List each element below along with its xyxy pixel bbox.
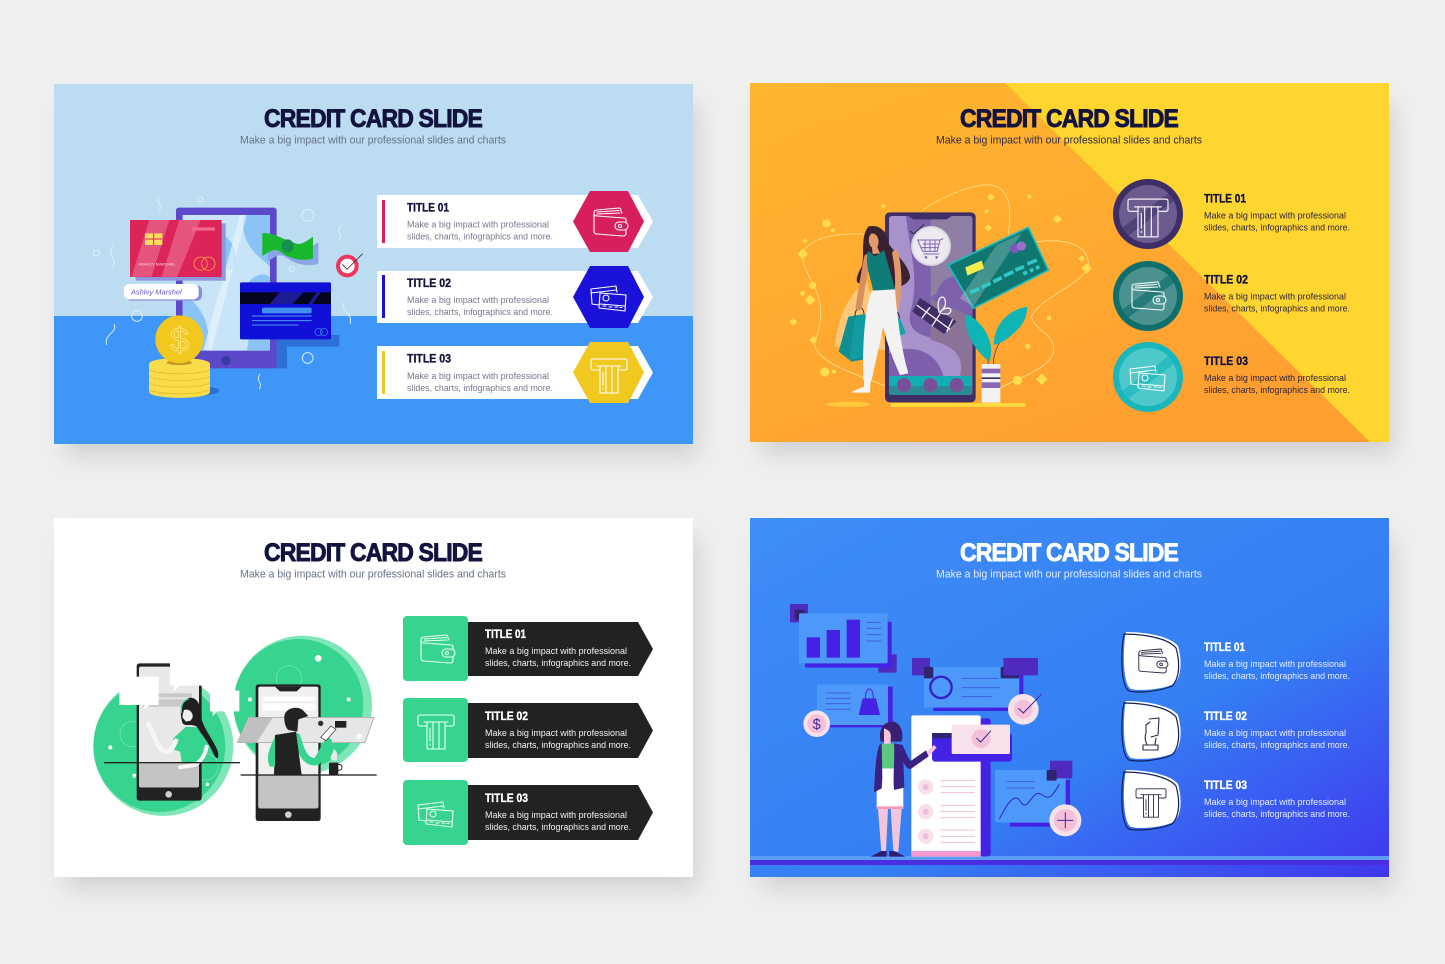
coin stack	[149, 315, 219, 398]
shopping bag card: $	[813, 717, 821, 733]
shopping bag card	[803, 684, 893, 737]
line chart card	[995, 761, 1081, 836]
text: title 02: slides, charts, infographics and more.	[1204, 304, 1350, 314]
red credit card: ASHLEY MARSHEL	[138, 262, 176, 266]
name label: Ashley Marshel	[130, 289, 182, 296]
row 1: TITLE 01	[407, 200, 449, 214]
row 1: slides, charts, infographics and more.	[485, 658, 631, 668]
text: title 03: Make a big impact with professional	[1204, 797, 1346, 807]
dashboard document	[911, 715, 1012, 857]
name label	[124, 284, 202, 301]
text: title 03: slides, charts, infographics and more.	[1204, 385, 1350, 395]
panel: light blue slide	[54, 84, 693, 444]
teal credit card	[948, 227, 1048, 308]
text: title 02	[1204, 272, 1350, 314]
right phone	[256, 684, 321, 821]
row 2	[377, 266, 653, 328]
speech bubbles	[119, 657, 239, 716]
row 2	[403, 698, 653, 762]
row 3: Make a big impact with professional	[407, 371, 549, 381]
text: title 03: TITLE 03	[1204, 354, 1248, 368]
row 3: slides, charts, infographics and more.	[407, 383, 553, 393]
row 1	[377, 191, 653, 252]
row 1: TITLE 01	[485, 627, 526, 641]
subtitle: Make a big impact with our professional slides and charts	[240, 134, 506, 146]
text: title 03: Make a big impact with professional	[1204, 373, 1346, 383]
illustration: woman shopping on phone	[789, 185, 1092, 407]
text: title 01: TITLE 01	[1204, 640, 1245, 654]
banknote	[262, 233, 318, 265]
row 2: Make a big impact with professional	[485, 728, 627, 738]
heading: CREDIT CARD SLIDE	[960, 105, 1178, 133]
text: title 01: Make a big impact with professional	[1204, 210, 1346, 220]
row 2: slides, charts, infographics and more.	[485, 740, 631, 750]
illustration: tablet, cards and coins	[93, 197, 363, 398]
text: title 02: Make a big impact with professional	[1204, 292, 1346, 302]
panel: orange and yellow slide	[750, 83, 1389, 442]
row 1	[403, 616, 653, 681]
text: title 03: slides, charts, infographics and more.	[1204, 809, 1350, 819]
check badge	[336, 254, 363, 277]
icon: wallet badge	[1113, 261, 1183, 331]
panel: blue slide	[750, 518, 1389, 877]
text: title 03	[1204, 778, 1350, 819]
coin stack: $	[170, 322, 189, 360]
text: title 02	[1204, 709, 1350, 750]
text: title 01: slides, charts, infographics and more.	[1204, 671, 1350, 681]
subtitle: Make a big impact with our professional slides and charts	[936, 568, 1202, 580]
text: title 01: Make a big impact with professional	[1204, 659, 1346, 669]
icon: cards badge	[1113, 342, 1183, 412]
heading: CREDIT CARD SLIDE	[264, 105, 482, 133]
row 2: slides, charts, infographics and more.	[407, 307, 553, 317]
floating card	[237, 717, 374, 743]
row 3	[377, 342, 653, 403]
icon: hand holding card blob	[1122, 701, 1181, 761]
coffee mug	[329, 748, 342, 775]
profile card	[912, 658, 1041, 725]
row 2: TITLE 02	[485, 709, 528, 723]
cart badge	[910, 224, 951, 266]
woman with shopping bags	[839, 226, 910, 393]
row 3: Make a big impact with professional	[485, 810, 627, 820]
icon: atm blob	[1122, 770, 1181, 830]
text: title 02: Make a big impact with professional	[1204, 728, 1346, 738]
text: title 01: TITLE 01	[1204, 192, 1246, 206]
left phone	[137, 663, 202, 801]
text: title 01	[1204, 192, 1350, 232]
panel shadows	[66, 104, 1394, 888]
red credit card	[130, 220, 222, 277]
panel: white slide	[54, 518, 693, 877]
text: title 03	[1204, 354, 1350, 395]
text: title 02: TITLE 02	[1204, 709, 1247, 723]
support agent	[148, 698, 218, 767]
row 2: TITLE 02	[407, 276, 451, 290]
text: title 03: TITLE 03	[1204, 778, 1247, 792]
subtitle: Make a big impact with our professional slides and charts	[936, 134, 1202, 146]
heading: CREDIT CARD SLIDE	[264, 539, 482, 567]
blue credit card	[240, 282, 331, 339]
row 3: TITLE 03	[485, 791, 528, 805]
potted plant	[966, 307, 1027, 403]
row 3: slides, charts, infographics and more.	[485, 822, 631, 832]
row 1: Make a big impact with professional	[407, 220, 549, 230]
row 2: Make a big impact with professional	[407, 295, 549, 305]
gift box	[912, 297, 957, 334]
presenter	[871, 722, 937, 857]
phone	[885, 212, 976, 402]
text: title 02: TITLE 02	[1204, 272, 1248, 286]
subtitle: Make a big impact with our professional slides and charts	[240, 568, 506, 580]
row 1: Make a big impact with professional	[485, 646, 627, 656]
customer	[268, 708, 336, 775]
illustration: woman presenting dashboard	[790, 604, 1081, 857]
row 1: slides, charts, infographics and more.	[407, 232, 553, 242]
icon: atm badge	[1113, 179, 1183, 249]
text: title 01: slides, charts, infographics and more.	[1204, 222, 1350, 232]
heading: CREDIT CARD SLIDE	[960, 539, 1178, 567]
bar chart card	[790, 604, 897, 673]
icon: wallet blob	[1122, 632, 1181, 692]
row 3: TITLE 03	[407, 352, 451, 366]
illustration: support agent and customer on phones	[93, 636, 377, 821]
text: title 02: slides, charts, infographics and more.	[1204, 740, 1350, 750]
text: title 01	[1204, 640, 1350, 681]
row 3	[403, 780, 653, 845]
